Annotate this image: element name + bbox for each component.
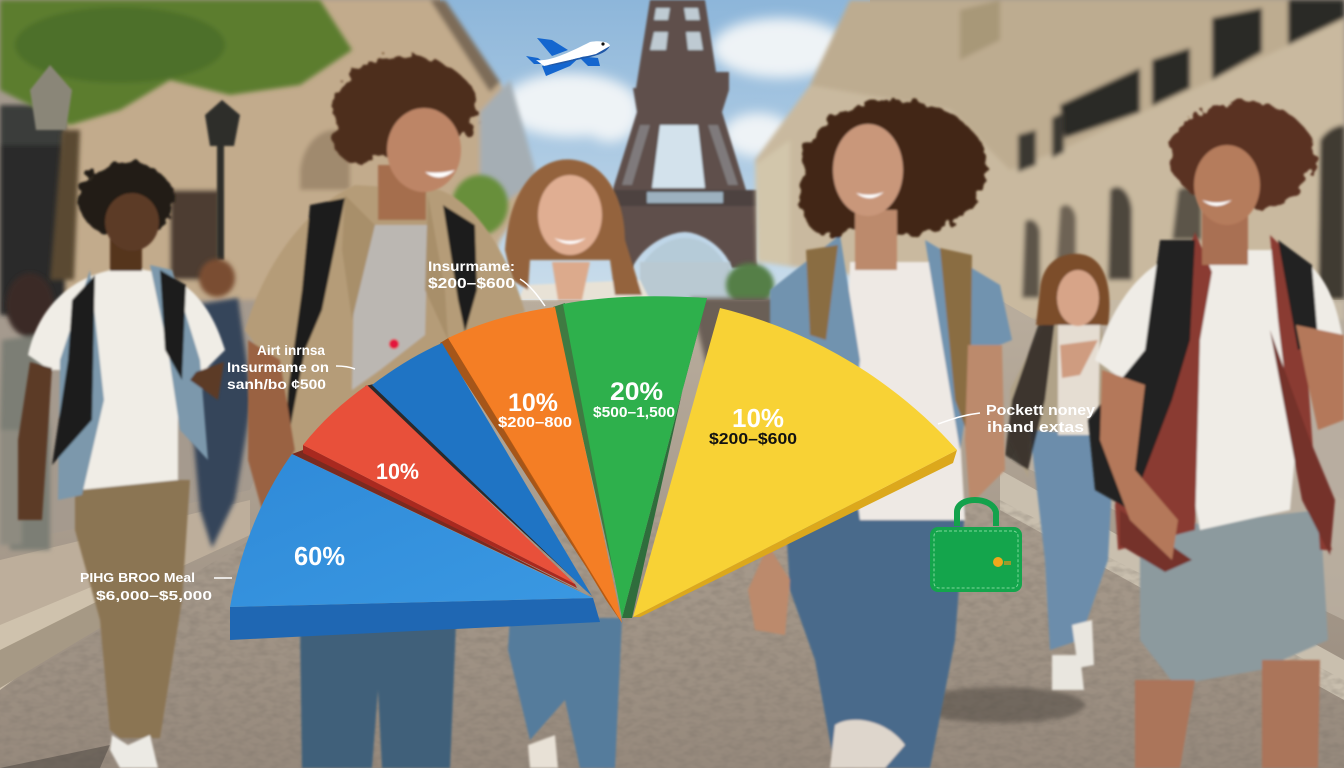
red dot on shirt (389, 339, 399, 349)
label: 10% yellow: 10% (732, 403, 784, 433)
label: green amount: $500–1,500 (593, 404, 675, 421)
tree (0, 0, 508, 280)
person: curly-haired student in denim (748, 100, 1012, 768)
label: 20%: 20% (610, 378, 663, 406)
person: right student in plaid (1088, 101, 1344, 768)
callout: insurance (428, 258, 545, 306)
label: orange amount: $200–800 (498, 414, 572, 431)
callout: pocket money: Pockett noney (986, 402, 1096, 419)
callout: main cost (80, 570, 232, 603)
right building (726, 0, 1344, 320)
callout: pocket money: ihand extas (987, 419, 1084, 436)
person: background girl with phone (1005, 254, 1115, 690)
street lamps (30, 65, 240, 260)
slice: 10% red (303, 385, 577, 588)
label: 10% red: 10% (376, 459, 419, 484)
icon: green wallet (930, 500, 1022, 592)
callout: main cost: $6,000–$5,000 (96, 588, 212, 603)
left building (0, 0, 538, 315)
label: 60%: 60% (294, 541, 345, 571)
slice: 10% orange (448, 307, 622, 623)
callout: airline insurance: Airt inrnsa (257, 342, 325, 358)
clouds (502, 18, 848, 188)
icon: airplane (526, 38, 610, 76)
slice: 60% blue (230, 454, 600, 640)
callout: airline insurance: sanh/bo ¢500 (227, 376, 326, 392)
callout: main cost: PIHG BROO Meal (80, 570, 195, 585)
gaps between slices (292, 303, 624, 622)
small background pedestrians (0, 259, 252, 550)
callout: pocket money (938, 402, 1096, 436)
callout: insurance: Insurmame: (428, 258, 515, 274)
callout: airline insurance: Insurmame on (227, 359, 329, 375)
slice: 20% green (563, 296, 707, 618)
eiffel tower (612, 0, 757, 302)
person: far left student (18, 162, 225, 768)
slice: 10% yellow (633, 308, 957, 617)
person: girl centre back (505, 159, 650, 768)
pie chart (230, 296, 957, 640)
callout: airline insurance (227, 342, 355, 392)
street ground (0, 294, 1344, 768)
person: tall student with tan shirt (245, 56, 525, 768)
label: 10% orange: 10% (508, 389, 558, 417)
callout: insurance: $200–$600 (428, 275, 515, 292)
sky (440, 0, 870, 310)
label: yellow amount: $200–$600 (709, 431, 797, 448)
slice: blue wedge (372, 343, 592, 596)
